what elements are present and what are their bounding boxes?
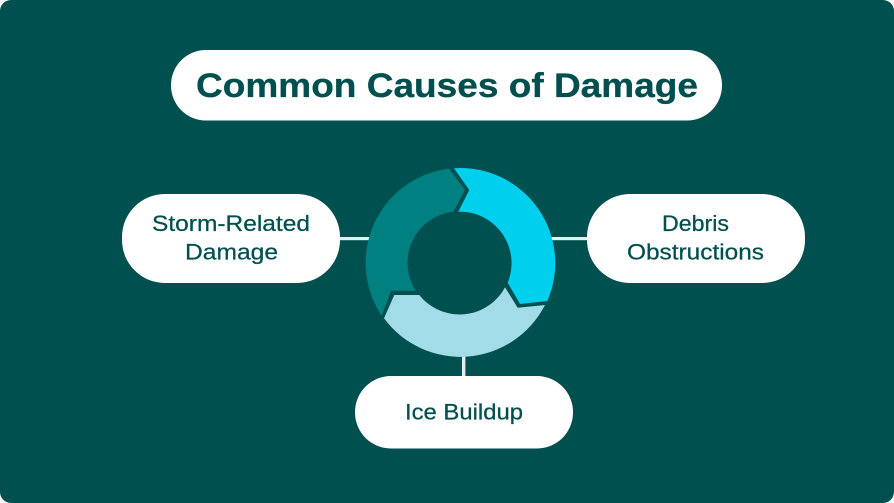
callout: ice buildup [355,376,573,448]
connector: debris obstructions [550,237,588,240]
callout: storm-related damage: Damage [185,240,278,264]
cycle diagram [366,168,555,357]
callout: storm-related damage: Storm-Related [152,211,310,236]
title [171,50,722,120]
connector: storm-related damage [339,237,372,240]
callout: storm-related damage [122,194,340,283]
connector: ice buildup [462,354,465,377]
callout: debris obstructions [587,194,805,283]
title: Common Causes of Damage [196,67,698,105]
segment: cyan arrow [454,168,555,304]
segment: light blue arrow [384,287,545,357]
segment: teal arrow [366,169,465,316]
callout: debris obstructions: Obstructions [627,240,764,264]
callout: debris obstructions: Debris [662,211,729,236]
callout: ice buildup: Ice Buildup [405,400,523,424]
